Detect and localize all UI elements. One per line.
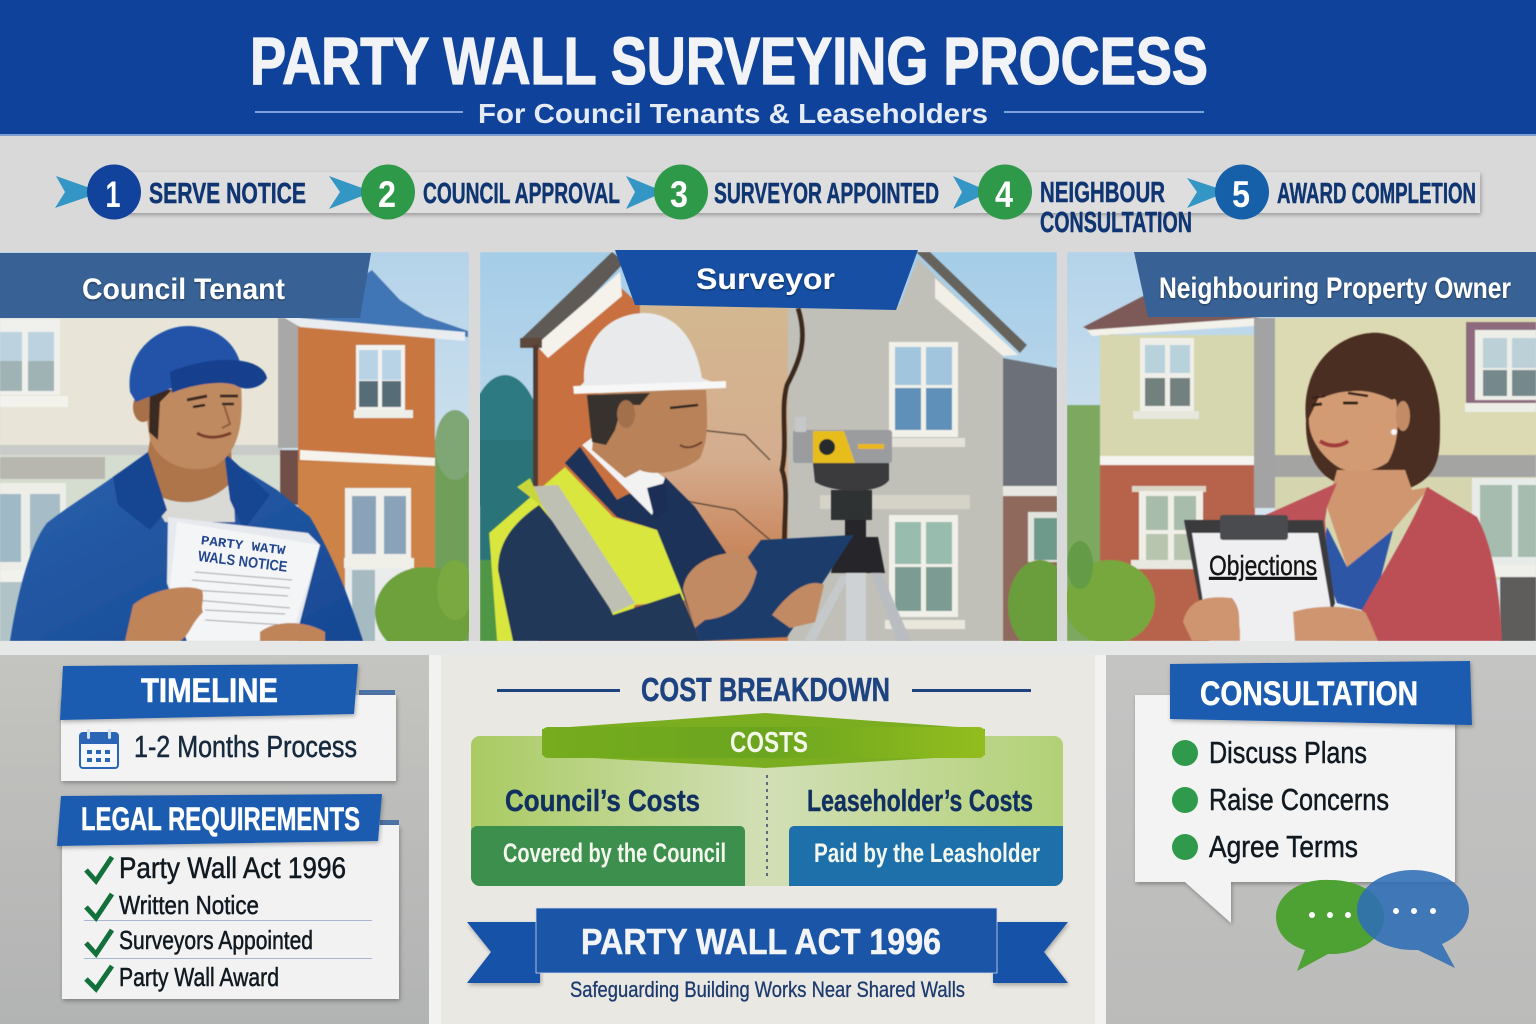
step 2: council approval: COUNCIL APPROVAL: [423, 178, 620, 210]
objections text: Objections: [1209, 550, 1317, 581]
notice text: PARTY WATW: [200, 533, 286, 558]
icon: speech bubbles: [1276, 870, 1469, 971]
step 4: neighbour consultation: CONSULTATION: [1040, 207, 1192, 239]
panel heading: surveyor: Surveyor: [696, 263, 835, 296]
subtitle: For Council Tenants & Leaseholders: [478, 98, 988, 129]
panel: legal requirements: [57, 794, 399, 999]
neighbouring roof: [1003, 358, 1057, 486]
step 3: surveyor appointed: SURVEYOR APPOINTED: [714, 178, 939, 210]
consultation heading: CONSULTATION: [1200, 675, 1418, 713]
checklist: Party Wall Award: [119, 962, 279, 992]
step 4: neighbour consultation: [953, 164, 1192, 239]
lower section backgrounds: [0, 641, 1536, 1024]
checklist: Surveyors Appointed: [119, 925, 313, 955]
checklist: [86, 852, 346, 992]
panel: timeline: [60, 664, 396, 781]
step 5: award completion: [1187, 164, 1476, 220]
heading: cost breakdown: COST BREAKDOWN: [641, 671, 890, 708]
tenant figure: [10, 326, 363, 641]
brick house: [278, 318, 298, 448]
panel: council tenant: [0, 252, 475, 657]
process steps: [55, 164, 1480, 239]
step 1: serve notice: SERVE NOTICE: [149, 178, 306, 210]
legal heading: LEGAL REQUIREMENTS: [81, 801, 360, 837]
step 2: council approval: [329, 164, 620, 220]
total station on tripod: [793, 417, 911, 641]
step 2: council approval: 2: [378, 174, 396, 215]
checklist: Party Wall Act 1996: [119, 852, 346, 885]
timeline text: 1-2 Months Process: [134, 729, 357, 764]
surveyor figure: [489, 313, 854, 641]
notice text: WALS NOTICE: [197, 548, 288, 576]
consultation heading: [1170, 661, 1472, 725]
step 3: surveyor appointed: 3: [670, 174, 688, 215]
heading: cost breakdown: [497, 671, 1031, 708]
costs banner: [542, 713, 985, 768]
icon: calendar: [80, 729, 118, 768]
list: Discuss Plans: [1209, 735, 1367, 770]
panel: costs: [471, 713, 1063, 886]
roof gables: [522, 252, 625, 350]
leaseholder's costs: [789, 783, 1063, 886]
leaseholder's costs: Leaseholder’s Costs: [807, 783, 1033, 818]
costs banner: COSTS: [730, 727, 808, 759]
step 4: neighbour consultation: 4: [995, 174, 1013, 215]
list: Raise Concerns: [1209, 782, 1389, 817]
checklist: Written Notice: [119, 890, 259, 920]
panel: neighbouring property owner: [1065, 252, 1536, 645]
step 3: surveyor appointed: [626, 164, 939, 220]
step 4: neighbour consultation: NEIGHBOUR: [1040, 177, 1165, 209]
panel: consultation: [1135, 661, 1472, 971]
notice text: [198, 536, 288, 572]
white house: [0, 318, 280, 448]
step 1: serve notice: [55, 164, 306, 220]
neighbour figure: [1183, 333, 1502, 645]
panel heading: council tenant: Council Tenant: [82, 273, 285, 306]
ribbon: party wall act 1996: PARTY WALL ACT 1996: [581, 921, 941, 962]
timeline heading: [60, 664, 358, 720]
ribbon: party wall act 1996: [467, 908, 1068, 1002]
title: PARTY WALL SURVEYING PROCESS: [250, 24, 1208, 99]
legal heading: [57, 794, 382, 846]
list: Agree Terms: [1209, 829, 1358, 864]
windows: [889, 342, 958, 437]
list: [1172, 735, 1389, 864]
council's costs: Council’s Costs: [505, 783, 700, 818]
header banner: [0, 0, 1536, 136]
panel heading: council tenant: [0, 253, 371, 318]
step 5: award completion: 5: [1232, 174, 1250, 215]
council's costs: Covered by the Council: [503, 838, 726, 868]
timeline heading: TIMELINE: [141, 672, 278, 710]
step 1: serve notice: 1: [106, 174, 120, 215]
ribbon subtitle: Safeguarding Building Works Near Shared Walls: [570, 977, 965, 1002]
leaseholder's costs: Paid by the Leasholder: [814, 838, 1040, 868]
panel heading: neighbouring property owner: [1134, 252, 1536, 317]
council's costs: [471, 783, 745, 886]
wall: [538, 285, 640, 641]
panel: surveyor: [467, 252, 1072, 650]
panel heading: surveyor: [615, 250, 918, 310]
trees and bush: [435, 440, 469, 641]
